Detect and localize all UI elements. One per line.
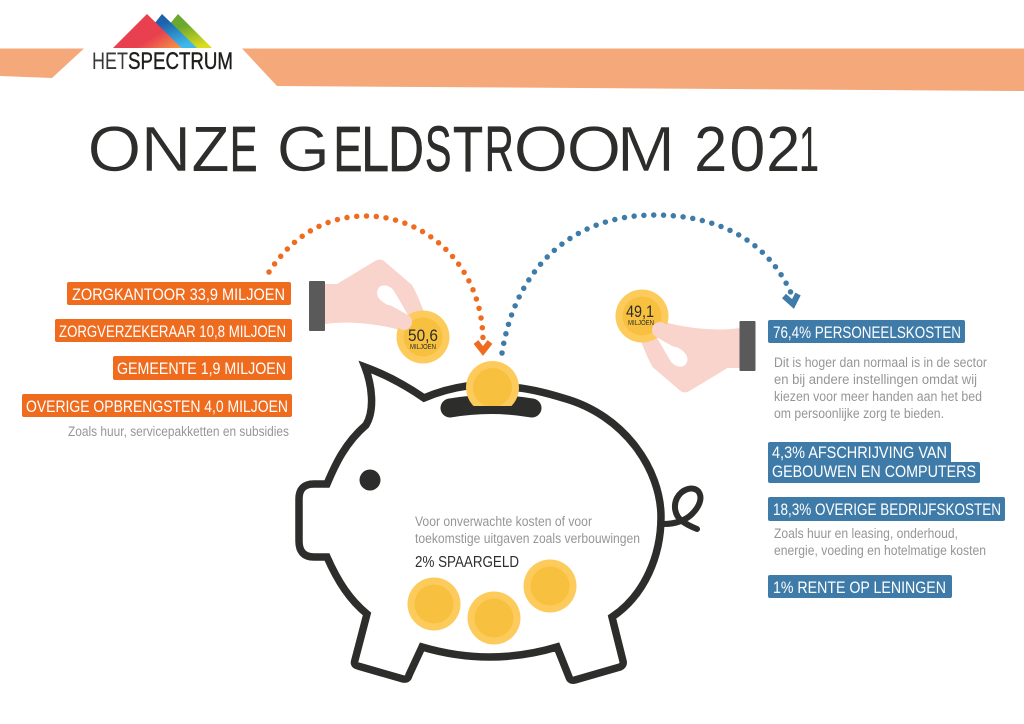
note: personeelskosten: Dit is hoger dan normaal is in de sector bbox=[774, 355, 987, 370]
icon: piggy bank bbox=[299, 361, 700, 680]
title: 1 bbox=[799, 113, 819, 185]
icon: hand inserting coin bbox=[309, 260, 450, 364]
coin 49,1 bbox=[616, 290, 668, 342]
label: zorgverzekeraar: ZORGVERZEKERAAR 10,8 MILJOEN bbox=[59, 323, 286, 341]
panel: savings bbox=[408, 514, 640, 644]
label: overige opbrengsten bbox=[22, 394, 292, 417]
label: overige bedrijfskosten bbox=[768, 497, 1005, 521]
panel: expense labels bbox=[768, 320, 1005, 598]
cuff bbox=[740, 321, 756, 371]
label: overige opbrengsten: OVERIGE OPBRENGSTEN 4,0 MILJOEN bbox=[26, 398, 288, 416]
title: 0 bbox=[729, 113, 765, 185]
label: personeelskosten: 76,4% PERSONEELSKOSTEN bbox=[773, 324, 961, 342]
savings description bbox=[415, 514, 640, 546]
title: L bbox=[361, 113, 389, 185]
arrow: orange dotted income arc bbox=[269, 216, 490, 351]
note: personeelskosten bbox=[774, 355, 987, 421]
coin 1 bbox=[408, 578, 460, 630]
savings heading: 2% SPAARGELD bbox=[415, 554, 519, 571]
pig tail bbox=[664, 489, 700, 529]
title: O bbox=[514, 113, 568, 185]
title: R bbox=[485, 113, 514, 185]
title: O bbox=[88, 113, 141, 185]
cuff bbox=[309, 281, 325, 331]
title: D bbox=[388, 113, 424, 185]
title: M bbox=[617, 113, 675, 185]
label: zorgverzekeraar bbox=[55, 319, 292, 342]
title: G bbox=[277, 113, 330, 185]
title: Z bbox=[192, 113, 229, 185]
label: rente op leningen: 1% RENTE OP LENINGEN bbox=[773, 579, 946, 597]
coin 49,1: MILJOEN bbox=[628, 320, 654, 327]
title: E bbox=[230, 113, 257, 185]
logo bbox=[92, 14, 233, 75]
hand bbox=[325, 260, 424, 331]
label: afschrijving: GEBOUWEN EN COMPUTERS bbox=[772, 463, 976, 481]
label: rente op leningen bbox=[768, 575, 952, 598]
coin 50,6: MILJOEN bbox=[410, 344, 436, 351]
title: N bbox=[141, 113, 191, 185]
title: S bbox=[425, 113, 451, 185]
note: overige bedrijfskosten bbox=[774, 526, 986, 558]
banner: right bbox=[242, 48, 1024, 91]
label: afschrijving: 4,3% AFSCHRIJVING VAN bbox=[772, 444, 947, 462]
logo: HET bbox=[92, 48, 128, 75]
coin 50,6: 50,6 bbox=[408, 326, 438, 345]
coin 2 bbox=[468, 592, 520, 644]
thumb bbox=[660, 330, 676, 339]
arrow: blue dotted expense arc bbox=[502, 215, 798, 353]
title: T bbox=[453, 113, 483, 185]
title: 2 bbox=[766, 113, 800, 185]
label: zorgkantoor: ZORGKANTOOR 33,9 MILJOEN bbox=[72, 286, 285, 304]
note: personeelskosten: om persoonlijke zorg te bieden. bbox=[774, 406, 944, 421]
note: personeelskosten: en bij andere instellingen omdat wij bbox=[774, 372, 977, 387]
label: afschrijving bbox=[768, 442, 980, 483]
coin in slot bbox=[466, 361, 519, 406]
title: 2 bbox=[694, 113, 727, 185]
banner: left bbox=[0, 48, 84, 78]
savings description: Voor onverwachte kosten of voor bbox=[415, 514, 592, 529]
pig body bbox=[299, 367, 661, 680]
title: O bbox=[566, 113, 621, 185]
note: overige bedrijfskosten: Zoals huur en leasing, onderhoud, bbox=[774, 526, 958, 541]
icon: hand taking coin bbox=[616, 290, 756, 392]
label: personeelskosten bbox=[768, 320, 965, 343]
note: personeelskosten: kiezen voor meer handen aan het bed bbox=[774, 389, 982, 404]
coin 3 bbox=[524, 560, 576, 612]
pig eye bbox=[360, 470, 380, 490]
coin 50,6 bbox=[396, 310, 450, 364]
panel: income labels bbox=[22, 282, 292, 439]
logo: SPECTRUM bbox=[128, 48, 233, 75]
thumb bbox=[388, 313, 404, 322]
label: gemeente bbox=[113, 356, 292, 380]
hand bbox=[640, 321, 740, 392]
coin 49,1: 49,1 bbox=[626, 302, 654, 321]
coin slot bbox=[450, 404, 532, 408]
title: E bbox=[334, 113, 362, 185]
label: gemeente: GEMEENTE 1,9 MILJOEN bbox=[117, 360, 286, 378]
note: overige bedrijfskosten: energie, voeding en hotelmatige kosten bbox=[774, 543, 986, 558]
note: overige opbrengsten: Zoals huur, servicepakketten en subsidies bbox=[68, 424, 289, 439]
savings description: toekomstige uitgaven zoals verbouwingen bbox=[415, 531, 640, 546]
